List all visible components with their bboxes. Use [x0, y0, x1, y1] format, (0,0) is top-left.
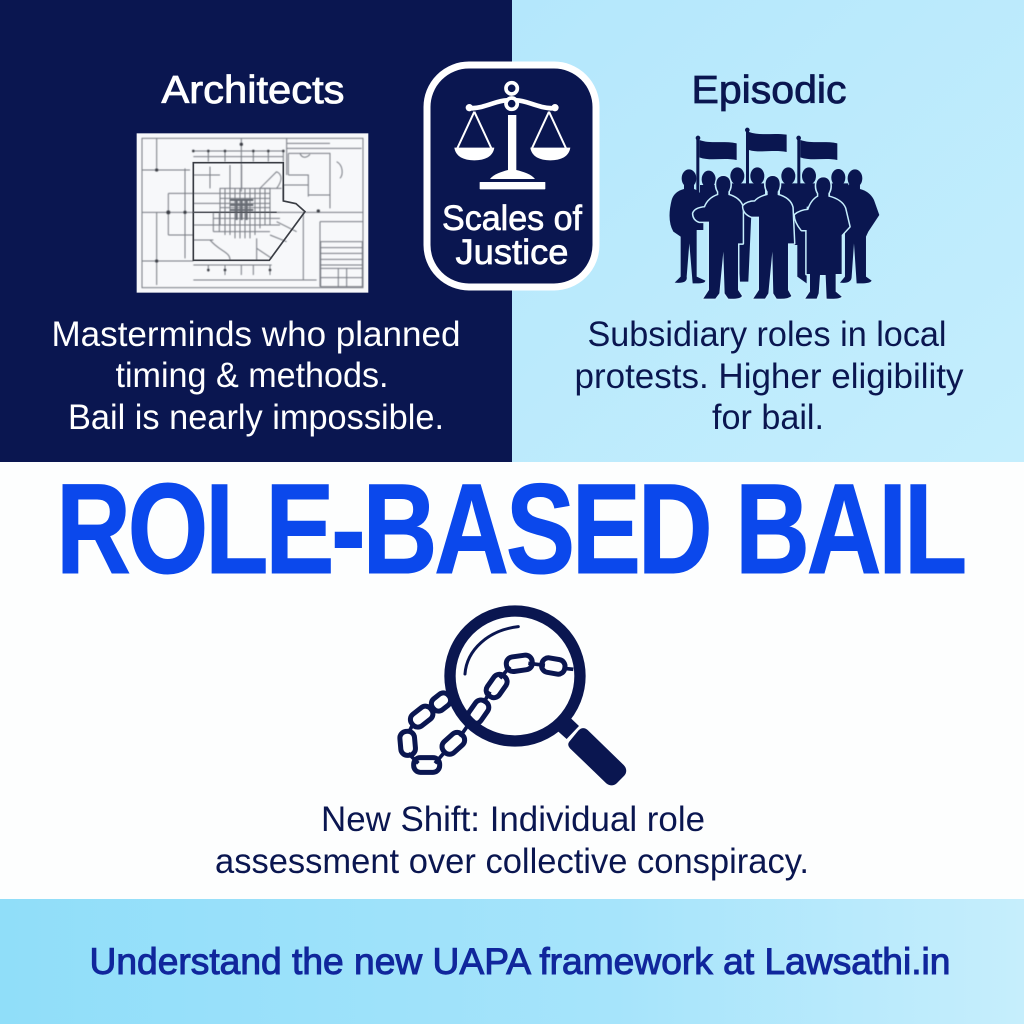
text: episodic description: protests. Higher eligibility	[574, 357, 964, 396]
chain	[399, 654, 573, 772]
footer text: Understand the new UAPA framework at Lawsathi.in	[90, 941, 950, 982]
panel: architects	[0, 0, 512, 462]
panel: episodic	[512, 0, 1024, 462]
lens ring	[450, 611, 580, 741]
icon: magnifying glass over chain	[399, 611, 626, 785]
icon: protest crowd with flags	[670, 128, 879, 299]
icon: city blueprint	[137, 133, 368, 293]
lens highlight	[465, 627, 518, 674]
handle	[558, 718, 579, 739]
text: new shift	[215, 800, 809, 881]
text: architects description	[52, 315, 460, 437]
text: episodic description	[574, 315, 964, 437]
heading: episodic: Episodic	[692, 69, 846, 112]
front row figures	[693, 176, 849, 299]
text: new shift: New Shift: Individual role	[321, 800, 705, 839]
footer banner	[0, 899, 1024, 1024]
text: architects description: timing & methods.	[116, 356, 388, 395]
heading: architects: Architects	[162, 69, 344, 112]
text: architects description: Bail is nearly impossible.	[68, 398, 444, 437]
text: new shift: assessment over collective conspiracy.	[215, 842, 809, 881]
text: episodic description: for bail.	[712, 398, 824, 437]
text: scales of justice label: Justice	[456, 233, 568, 272]
text: scales of justice label	[442, 199, 582, 272]
icon: scales	[454, 83, 570, 189]
badge: scales of justice	[427, 65, 596, 287]
text: episodic description: Subsidiary roles in local	[588, 315, 946, 354]
text: architects description: Masterminds who planned	[52, 315, 460, 354]
flags	[696, 128, 837, 215]
back row figures	[670, 167, 879, 283]
text: scales of justice label: Scales of	[442, 199, 582, 238]
